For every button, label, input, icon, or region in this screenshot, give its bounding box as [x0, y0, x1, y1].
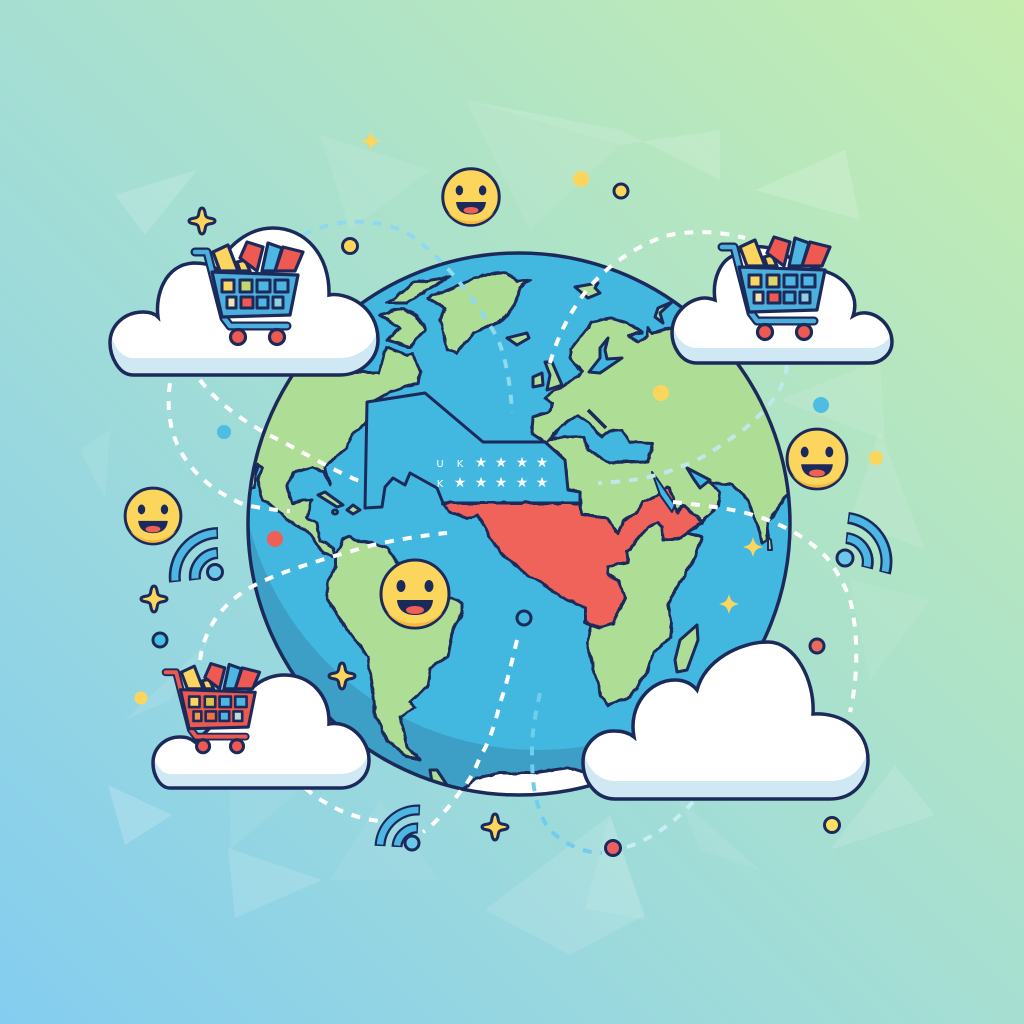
mediterranean sea	[548, 415, 652, 463]
flag stars: ★	[475, 455, 487, 471]
globe	[246, 251, 792, 797]
cloud outline: lower left	[153, 675, 369, 788]
flag stars: ★	[516, 475, 528, 491]
antarctica	[463, 766, 588, 794]
shopping cart: upper right	[722, 237, 830, 340]
flag stars: ★	[454, 475, 466, 491]
wifi icon: bottom	[380, 810, 420, 850]
decorative dots	[134, 171, 883, 856]
flag stars: ★	[495, 475, 507, 491]
flag stars: ★	[536, 475, 548, 491]
south america	[327, 537, 462, 760]
smiley: on south america	[381, 560, 449, 628]
iceland	[507, 333, 529, 345]
british isles	[533, 362, 562, 390]
wifi icon: right	[837, 518, 886, 573]
caribbean islands	[318, 492, 360, 514]
sparkles	[141, 131, 763, 840]
flag stars: ★	[536, 455, 548, 471]
novaya zemlya	[655, 302, 672, 323]
svalbard	[575, 283, 600, 298]
arctic islands	[387, 277, 450, 303]
north america	[240, 347, 420, 557]
africa south	[587, 523, 702, 705]
globe outline	[248, 253, 790, 795]
persian gulf	[687, 468, 710, 488]
cloud: lower left	[154, 676, 368, 786]
flag stars: ★	[495, 455, 507, 471]
cloud outline: upper left	[110, 228, 378, 375]
flag stars: K	[457, 459, 464, 470]
flag stars: U	[436, 459, 444, 470]
shopping cart: upper left	[195, 242, 303, 344]
red sea	[652, 472, 675, 512]
eurasia and north africa	[532, 318, 800, 543]
cloud outline: lower right	[583, 642, 868, 799]
sri lanka	[768, 537, 772, 550]
smiley: top	[443, 169, 499, 225]
map content	[250, 254, 788, 794]
shopping cart: lower left, red	[166, 664, 260, 753]
flag stars: ★	[475, 475, 487, 491]
wifi icon: left	[175, 533, 222, 582]
dashed connection routes	[169, 222, 856, 853]
cloud outline: upper right	[672, 247, 892, 363]
red territory	[443, 487, 702, 627]
antarctic peninsula	[428, 768, 448, 784]
smiley: right	[787, 429, 847, 489]
greenland	[428, 273, 530, 353]
cloud: upper right	[674, 248, 890, 362]
baffin island	[380, 308, 425, 347]
flag stars: ★	[516, 455, 528, 471]
madagascar	[675, 625, 698, 672]
blue territory polygon	[365, 393, 580, 508]
smiley: left	[125, 488, 181, 544]
cloud: upper left	[112, 230, 376, 374]
baltic sea	[589, 338, 622, 373]
globe ocean	[248, 253, 790, 795]
adriatic	[588, 410, 606, 428]
cloud: lower right	[584, 644, 866, 798]
flag stars: K	[437, 479, 444, 490]
flag stars	[436, 455, 548, 491]
